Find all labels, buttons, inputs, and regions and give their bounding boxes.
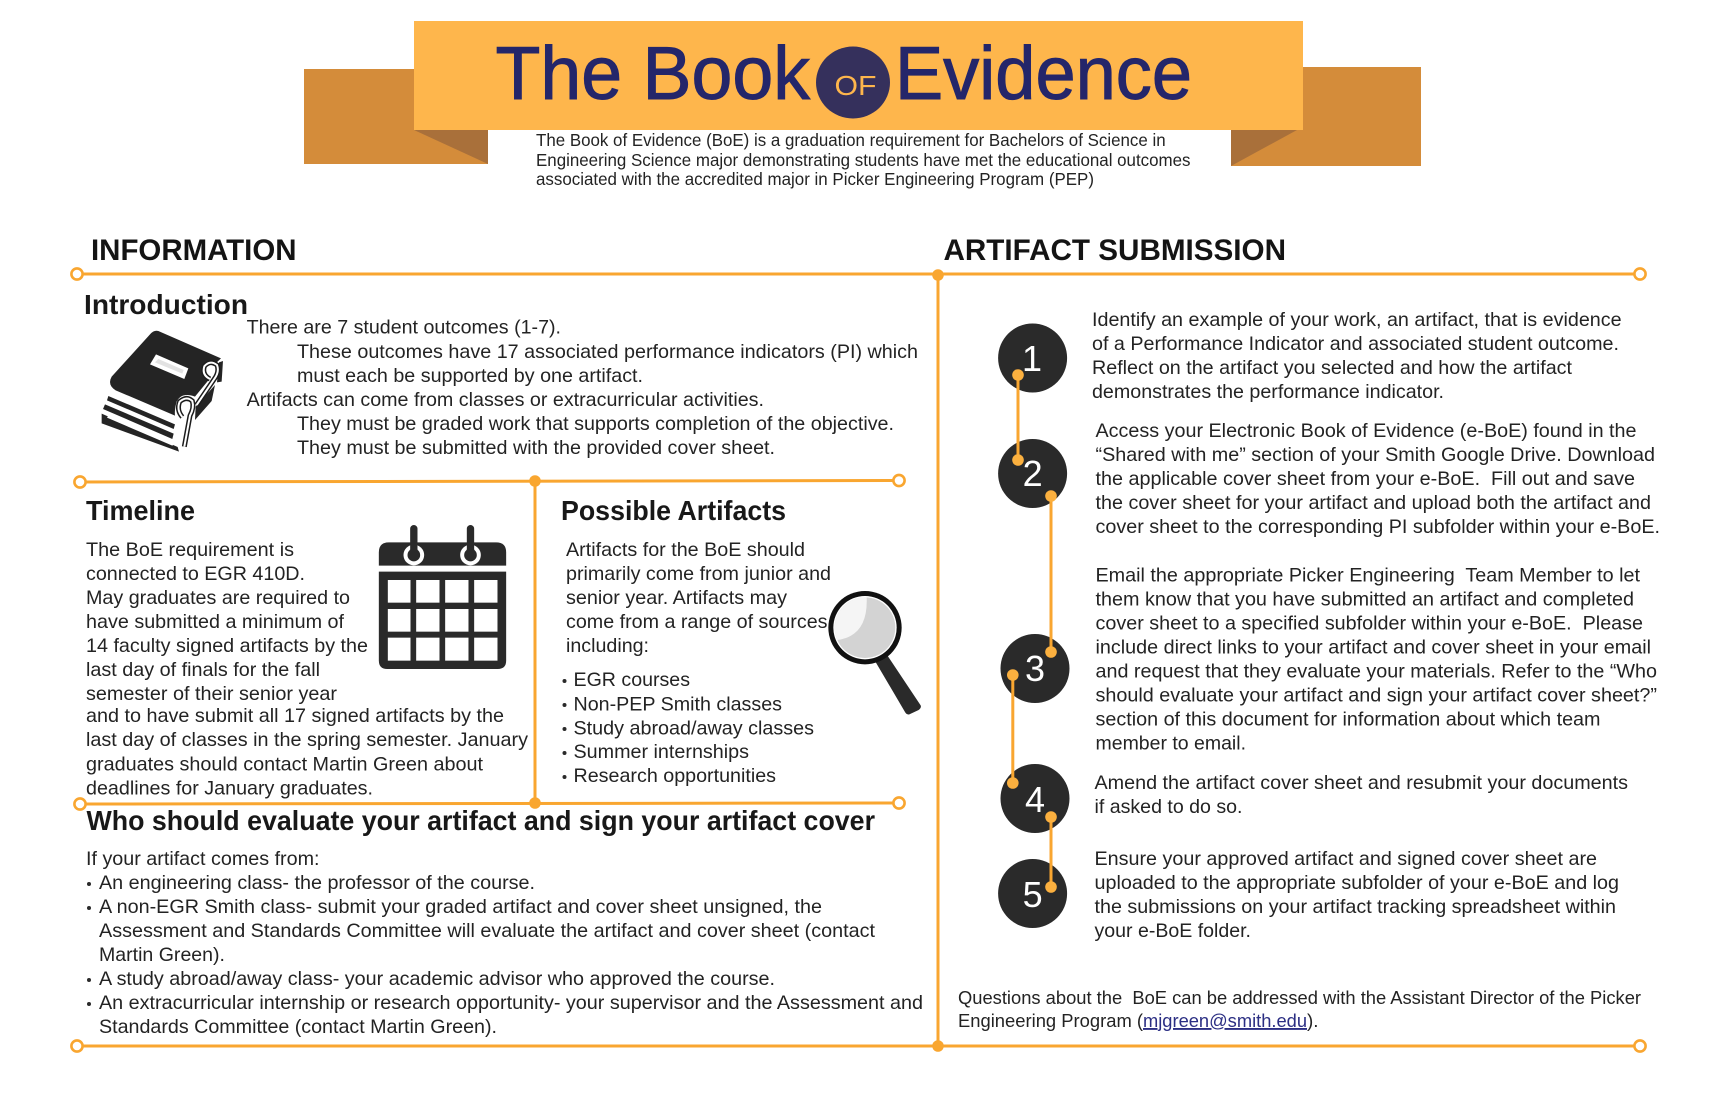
step 5 circle: 5	[1023, 874, 1043, 915]
step 3 text: Email the appropriate Picker Engineering Team Member to let	[1096, 564, 1640, 586]
step 4 circle: 4	[1025, 779, 1045, 820]
possible artifacts text: including:	[566, 635, 649, 657]
left ribbon fold	[414, 130, 488, 164]
who should evaluate text: A non-EGR Smith class- submit your graded artifact and cover sheet unsigned, the	[99, 896, 822, 918]
step 4 circle	[1000, 764, 1070, 833]
step 3 text: and request that they evaluate your materials. Refer to the “Who	[1096, 660, 1657, 682]
step 5 text: the submissions on your artifact tracking spreadsheet within	[1094, 896, 1616, 918]
step 5 text: Ensure your approved artifact and signed cover sheet are	[1094, 848, 1597, 870]
panel: who should evaluate	[86, 805, 923, 1038]
step 1 circle	[998, 324, 1067, 392]
contact note	[958, 987, 1641, 1031]
step 5 text	[1094, 848, 1619, 942]
step 2 text	[1096, 420, 1660, 538]
who should evaluate text: Assessment and Standards Committee will evaluate the artifact and cover sheet (contact	[99, 920, 876, 942]
connector 1 to 2	[1012, 369, 1024, 466]
contact note: Questions about the BoE can be addressed with the Assistant Director of the Picker	[958, 987, 1641, 1008]
introduction text: They must be submitted with the provided cover sheet.	[297, 437, 775, 459]
step 2 circle	[998, 439, 1067, 508]
who should evaluate text: An engineering class- the professor of the course.	[99, 872, 535, 894]
right ribbon fold	[1231, 130, 1297, 166]
connector 2 to 3	[1045, 490, 1057, 658]
icon: magnifying glass	[828, 591, 921, 714]
timeline text: connected to EGR 410D.	[86, 563, 305, 585]
who should evaluate text	[86, 848, 923, 1038]
step 2 text: the applicable cover sheet from your e-BoE. Fill out and save	[1096, 468, 1635, 490]
step 2 text: cover sheet to the corresponding PI subfolder within your e-BoE.	[1096, 516, 1660, 538]
step 3 text: section of this document for information about which team	[1096, 708, 1600, 730]
possible artifacts list: Research opportunities	[574, 765, 776, 787]
possible artifacts list: EGR courses	[574, 669, 690, 691]
introduction text	[247, 316, 918, 459]
timeline text: graduates should contact Martin Green about	[86, 754, 484, 776]
framework lines	[71, 268, 1646, 1052]
panel: timeline	[86, 495, 528, 800]
possible artifacts list: Summer internships	[574, 741, 749, 763]
step 2 text: Access your Electronic Book of Evidence (e-BoE) found in the	[1096, 420, 1636, 442]
step 5 circle	[998, 859, 1067, 928]
possible artifacts list	[562, 669, 814, 787]
step 1 text: Identify an example of your work, an artifact, that is evidence	[1092, 309, 1622, 331]
intro description: associated with the accredited major in Picker Engineering Program (PEP)	[536, 169, 1094, 189]
timeline text: deadlines for January graduates.	[86, 778, 373, 800]
panel: artifact submission steps	[958, 309, 1660, 1031]
who should evaluate text: Standards Committee (contact Martin Green).	[99, 1016, 497, 1038]
heading: Possible Artifacts: Possible Artifacts	[561, 495, 786, 526]
step 5 text: uploaded to the appropriate subfolder of your e-BoE and log	[1094, 872, 1619, 894]
step 3 text: them know that you have submitted an artifact and completed	[1096, 588, 1634, 610]
heading: Timeline: Timeline	[86, 495, 195, 526]
connector 3 to 4	[1007, 669, 1019, 789]
panel: possible artifacts	[561, 495, 921, 787]
heading: Introduction: Introduction	[84, 289, 248, 320]
step 3 text: cover sheet to a specified subfolder within your e-BoE. Please	[1096, 612, 1643, 634]
step 3 circle	[1000, 634, 1070, 703]
icon: calendar	[379, 525, 506, 669]
step 3 text: member to email.	[1096, 732, 1246, 754]
step 2 text: “Shared with me” section of your Smith Google Drive. Download	[1096, 444, 1655, 466]
possible artifacts text: primarily come from junior and	[566, 563, 831, 585]
step 3 text	[1096, 564, 1657, 754]
step 1 text	[1092, 309, 1622, 403]
step 2 circle: 2	[1023, 453, 1043, 494]
title banner	[304, 21, 1421, 166]
right ribbon tail	[1231, 67, 1421, 166]
intro description: Engineering Science major demonstrating students have met the educational outcomes	[536, 150, 1191, 170]
intro description	[536, 130, 1191, 189]
who should evaluate text: Martin Green).	[99, 944, 225, 966]
step 4 text: Amend the artifact cover sheet and resubmit your documents	[1094, 772, 1628, 794]
step 1 circle: 1	[1022, 338, 1042, 379]
contact note: ).	[1307, 1010, 1318, 1031]
step 1 text: demonstrates the performance indicator.	[1092, 381, 1444, 403]
contact note: Engineering Program (	[958, 1010, 1144, 1031]
timeline text: have submitted a minimum of	[86, 611, 344, 633]
icon: book	[102, 331, 223, 452]
step 2 text: the cover sheet for your artifact and upload both the artifact and	[1096, 492, 1651, 514]
heading: INFORMATION: INFORMATION	[91, 234, 296, 267]
timeline text: May graduates are required to	[86, 587, 350, 609]
heading: ARTIFACT SUBMISSION: ARTIFACT SUBMISSION	[944, 234, 1286, 267]
possible artifacts text	[566, 539, 831, 657]
step 1 text: of a Performance Indicator and associated student outcome.	[1092, 333, 1619, 355]
introduction text: There are 7 student outcomes (1-7).	[247, 316, 561, 338]
possible artifacts text: senior year. Artifacts may	[566, 587, 787, 609]
step 3 text: include direct links to your artifact and cover sheet in your email	[1096, 636, 1651, 658]
step 5 text: your e-BoE folder.	[1094, 920, 1251, 942]
title text: Evidence: Evidence	[895, 31, 1192, 115]
possible artifacts list: Study abroad/away classes	[574, 718, 814, 740]
contact note: mjgreen@smith.edu	[1143, 1010, 1307, 1031]
step 3 text: should evaluate your artifact and sign your artifact cover sheet?”	[1096, 684, 1657, 706]
timeline text: and to have submit all 17 signed artifacts by the	[86, 705, 504, 727]
who should evaluate text: A study abroad/away class- your academic advisor who approved the course.	[99, 968, 775, 990]
left ribbon tail	[304, 69, 488, 164]
timeline text	[86, 539, 528, 800]
introduction text: must each be supported by one artifact.	[297, 365, 643, 387]
step 1 text: Reflect on the artifact you selected and how the artifact	[1092, 357, 1572, 379]
title circle: OF	[816, 46, 890, 118]
title circle: OF: OF	[834, 70, 876, 101]
step 4 text	[1094, 772, 1628, 818]
heading: who should evaluate: Who should evaluate your artifact and sign your artifact cover	[86, 805, 875, 836]
timeline text: last day of finals for the fall	[86, 659, 320, 681]
title text: The Book: The Book	[496, 31, 810, 115]
timeline text: 14 faculty signed artifacts by the	[86, 635, 368, 657]
introduction text: They must be graded work that supports completion of the objective.	[297, 413, 894, 435]
who should evaluate text: An extracurricular internship or research opportunity- your supervisor and the Assessment and	[99, 992, 923, 1014]
panel: introduction	[84, 289, 918, 459]
timeline text: The BoE requirement is	[86, 539, 294, 561]
possible artifacts text: Artifacts for the BoE should	[566, 539, 805, 561]
step 4 text: if asked to do so.	[1094, 796, 1242, 818]
timeline text: last day of classes in the spring semester. January	[86, 729, 528, 751]
intro description: The Book of Evidence (BoE) is a graduation requirement for Bachelors of Science in	[536, 130, 1166, 150]
banner face	[414, 21, 1303, 130]
introduction text: Artifacts can come from classes or extracurricular activities.	[247, 389, 764, 411]
who should evaluate text: If your artifact comes from:	[86, 848, 320, 870]
possible artifacts list: Non-PEP Smith classes	[574, 694, 782, 716]
step 3 circle: 3	[1025, 648, 1045, 689]
connector 4 to 5	[1045, 811, 1057, 893]
timeline text: semester of their senior year	[86, 683, 337, 705]
possible artifacts text: come from a range of sources	[566, 611, 828, 633]
introduction text: These outcomes have 17 associated performance indicators (PI) which	[297, 341, 918, 363]
step circles and connectors	[998, 324, 1070, 928]
